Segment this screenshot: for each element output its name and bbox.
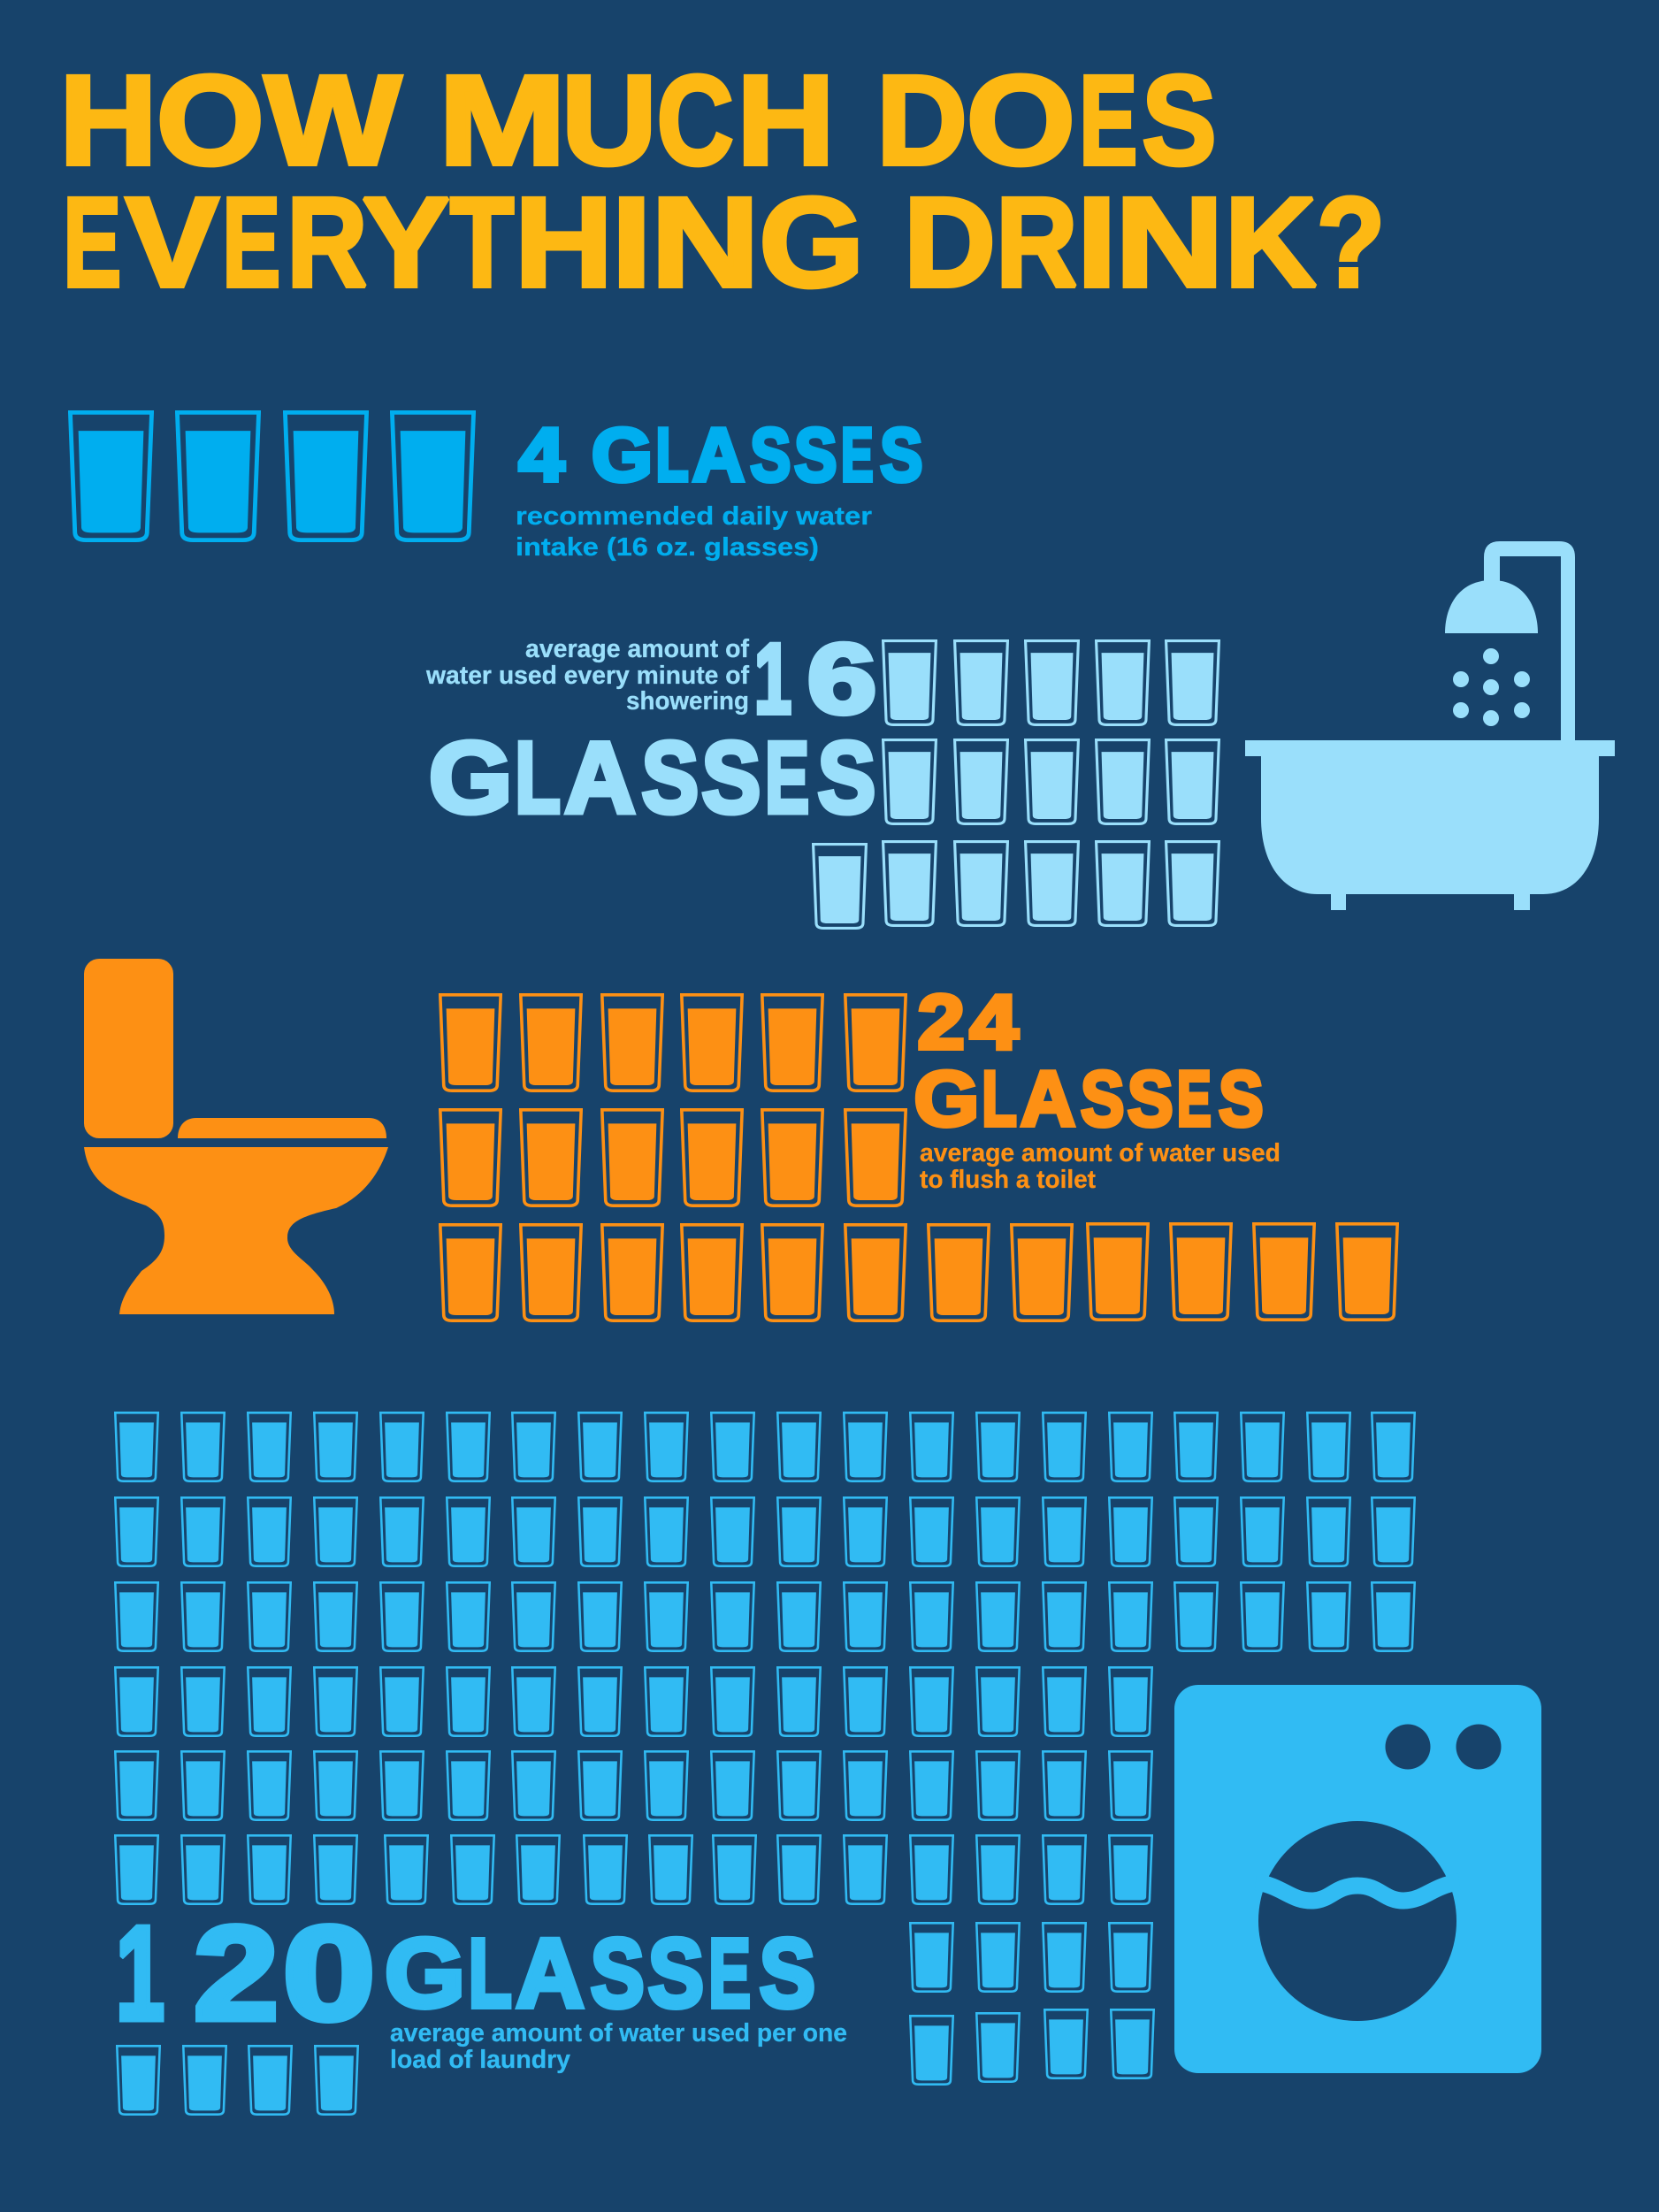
- heading: glasses: S: [760, 1919, 815, 2028]
- heading: glasses: S: [1219, 1054, 1264, 1143]
- heading: 120: 1: [116, 1898, 164, 2047]
- heading: glasses: A: [516, 1919, 584, 2028]
- heading: glasses: S: [818, 722, 875, 835]
- title: E: [63, 172, 121, 313]
- title: O: [157, 50, 264, 191]
- heading: glasses: E: [708, 1919, 751, 2028]
- heading: 24: 2: [918, 980, 965, 1065]
- heading: 4 glasses: G: [592, 414, 653, 497]
- heading: 24: 4: [970, 980, 1018, 1065]
- heading: 4 glasses: A: [692, 414, 745, 497]
- title: R: [996, 172, 1077, 313]
- icon: row of 4 glasses: [70, 412, 474, 540]
- text: average amount of water used to flush a toilet: average amount of water used: [920, 1139, 1281, 1167]
- title: I: [1077, 172, 1116, 313]
- panel: 24 glasses toilet: [84, 959, 1397, 1320]
- text: recommended daily water intake: intake (16 oz. glasses): [516, 533, 819, 562]
- text: average amount of water used per one load of laundry: average amount of water used per one: [390, 2019, 847, 2047]
- title: U: [562, 50, 657, 191]
- heading: glasses: A: [1021, 1054, 1075, 1143]
- heading: glasses: L: [469, 1919, 512, 2028]
- title: T: [450, 172, 514, 313]
- heading: 120: 2: [194, 1898, 279, 2047]
- panel: 120 glasses laundry: [115, 1412, 1541, 2115]
- heading: glasses: L: [515, 722, 561, 835]
- text: average amount of water used per one load of laundry: load of laundry: [390, 2046, 570, 2074]
- text: average amount of water used every minute of showering: [425, 635, 749, 716]
- title: ?: [1317, 172, 1385, 313]
- panel: 4 glasses recommended intake: [70, 412, 922, 562]
- title: I: [612, 172, 651, 313]
- heading: 4 glasses: S: [794, 414, 837, 497]
- text: average amount of water used every minute of showering: showering: [626, 687, 749, 716]
- heading: 4 glasses: L: [656, 414, 689, 497]
- title: N: [1115, 172, 1224, 313]
- title: H: [59, 50, 157, 191]
- title: O: [967, 50, 1075, 191]
- panel: 16 glasses showering: [425, 541, 1615, 928]
- heading: 16: 1: [754, 624, 791, 734]
- heading: glasses: A: [564, 722, 635, 835]
- text: average amount of water used every minute of showering: water used every minute of: [425, 662, 749, 690]
- heading: glasses: S: [642, 722, 699, 835]
- title: [59, 50, 1385, 313]
- title: K: [1225, 172, 1317, 313]
- heading: 4 glasses: 4: [519, 414, 564, 497]
- heading: glasses: S: [648, 1919, 704, 2028]
- title: D: [904, 172, 996, 313]
- title: D: [876, 50, 967, 191]
- title: M: [439, 50, 566, 191]
- title: R: [287, 172, 367, 313]
- heading: glasses: G: [429, 722, 512, 835]
- text: average amount of water used every minute of showering: average amount of: [525, 635, 749, 663]
- heading: 4 glasses: S: [750, 414, 791, 497]
- heading: glasses: G: [385, 1919, 465, 2028]
- title: C: [657, 50, 733, 191]
- heading: glasses: G: [914, 1054, 979, 1143]
- title: G: [760, 172, 864, 313]
- icon: 24 glasses: [440, 995, 1397, 1320]
- heading: glasses: E: [765, 722, 809, 835]
- text: recommended daily water intake: [516, 502, 872, 562]
- title: Y: [363, 172, 449, 313]
- icon: bathtub with shower: [1245, 541, 1615, 910]
- text: average amount of water used to flush a toilet: to flush a toilet: [920, 1166, 1096, 1194]
- title: E: [1079, 50, 1137, 191]
- icon: 120 glasses: [115, 1412, 1415, 2115]
- title: H: [737, 50, 835, 191]
- title: E: [222, 172, 280, 313]
- heading: 120: 0: [283, 1898, 375, 2047]
- title: S: [1143, 50, 1216, 191]
- icon: toilet: [84, 959, 388, 1314]
- icon: 16 glasses: [814, 641, 1219, 928]
- title: W: [264, 50, 401, 191]
- title: V: [126, 172, 218, 313]
- title: H: [515, 172, 613, 313]
- heading: glasses: E: [1177, 1054, 1212, 1143]
- heading: glasses: L: [982, 1054, 1017, 1143]
- heading: glasses: S: [591, 1919, 645, 2028]
- heading: glasses: S: [1128, 1054, 1174, 1143]
- heading: glasses: S: [702, 722, 761, 835]
- title: N: [651, 172, 760, 313]
- icon: washing machine: [1174, 1685, 1541, 2073]
- text: average amount of water used to flush a toilet: [920, 1139, 1281, 1194]
- text: average amount of water used per one load of laundry: [390, 2019, 847, 2074]
- heading: 16: 6: [807, 624, 876, 734]
- heading: 4 glasses: S: [880, 414, 922, 497]
- text: recommended daily water intake: recommended daily water: [516, 502, 872, 531]
- heading: 4 glasses: E: [841, 414, 874, 497]
- heading: glasses: S: [1081, 1054, 1124, 1143]
